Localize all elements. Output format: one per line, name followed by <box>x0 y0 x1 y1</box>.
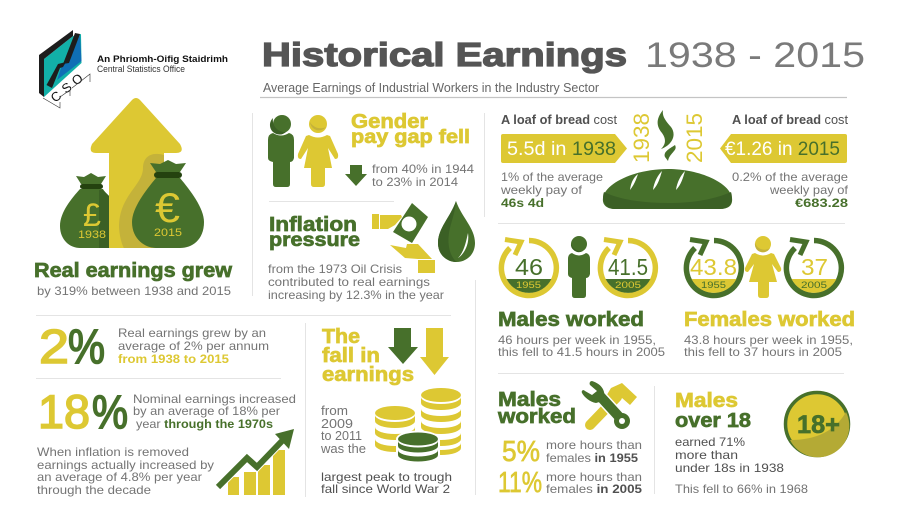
stat: 11 percent: more hours than <box>546 470 642 484</box>
text: from 1938 to 2015 <box>118 352 229 366</box>
icon: wrench and hammer <box>582 381 637 429</box>
panel: males worked hours <box>498 236 665 359</box>
icon: pound money bag 1938: £ <box>83 197 101 233</box>
icon: euro money bag 2015: 2015 <box>154 227 182 239</box>
chart: 2005 female hours ring: 37 <box>801 254 828 280</box>
text <box>675 435 808 496</box>
bread 2015 label: 0.2% of the average <box>732 170 848 184</box>
panel: 2 percent growth <box>39 321 269 374</box>
heading <box>351 111 470 148</box>
bread 2015 label: weekly pay of <box>769 183 849 197</box>
icon: pound money bag 1938: 1938 <box>78 229 106 241</box>
text: This fell to 66% in 1968 <box>675 482 808 496</box>
logo: Central Statistics Office: Central Statistics Office <box>97 64 185 75</box>
text <box>133 392 296 431</box>
text: 46 hours per week in 1955, <box>498 333 656 347</box>
icon: green down arrow <box>388 328 418 364</box>
text: average of 2% per annum <box>118 339 269 353</box>
heading: earnings <box>322 364 414 386</box>
text: inflation removed: through the decade <box>37 483 151 497</box>
text: increasing by 12.3% in the year <box>268 288 444 302</box>
heading <box>322 326 414 386</box>
heading: Gender <box>351 111 428 133</box>
icon: female figure <box>745 236 781 298</box>
chart: 1955 male hours ring <box>501 240 556 295</box>
text: largest peak: fall since World War 2 <box>321 482 450 496</box>
text: under 18s in 1938 <box>675 461 784 475</box>
panel: 18 percent growth <box>37 385 296 497</box>
bread 1938 label: weekly pay of <box>500 183 583 197</box>
chart: rising bars with arrow <box>218 429 294 495</box>
text: to 2011 <box>321 429 362 443</box>
text: contributed to real earnings <box>268 275 430 289</box>
bread 1938 label: 5.5d in 1938 <box>507 139 616 160</box>
heading: fall in <box>322 345 380 367</box>
icon: 18+ badge: 18+ <box>797 411 840 439</box>
text: by 319% between 1938 and 2015 <box>37 284 231 298</box>
logo: Central Statistics Office: O <box>69 70 86 88</box>
icon: pound money bag 1938 <box>60 173 109 248</box>
heading: Females worked <box>684 309 855 331</box>
text <box>268 262 444 302</box>
text: more than <box>675 448 738 462</box>
text: was the <box>320 442 366 456</box>
bread 2015 label: €683.28 <box>795 196 848 210</box>
text: 2009 <box>321 417 353 431</box>
heading: Males worked <box>498 309 644 331</box>
icon: euro money bag 2015: € <box>155 184 180 231</box>
panel: the fall in earnings <box>320 326 461 496</box>
logo: Central Statistics Office: C <box>48 88 64 105</box>
text <box>684 333 853 359</box>
panel: real earnings grew <box>34 98 232 298</box>
heading: Real earnings grew <box>34 260 232 282</box>
chart: 2005 male hours ring: 2005 <box>615 280 641 290</box>
heading: The <box>322 326 360 348</box>
icon: loaf of bread <box>603 169 732 209</box>
icon: male figure <box>568 236 590 298</box>
text: earned 71% <box>675 435 745 449</box>
text: largest peak <box>321 470 452 496</box>
text: inflation removed: earnings actually increased by <box>37 458 214 472</box>
icon: 18+ badge <box>786 392 849 457</box>
chart: 2005 female hours ring <box>786 240 841 295</box>
stat: 5 percent: more hours than <box>546 438 642 452</box>
chart: 2005 male hours ring: 41.5 <box>608 254 648 280</box>
big number: 2 <box>39 321 69 374</box>
big number: 18 <box>38 385 90 438</box>
text: 43.8 hours per week in 1955, <box>684 333 853 347</box>
bread 2015 label: €1.26 in 2015 <box>725 139 840 160</box>
icon: female figure <box>298 115 338 187</box>
text <box>320 404 366 456</box>
heading <box>675 390 751 432</box>
bread 1938 label: A loaf of bread cost <box>501 113 618 127</box>
icon: oil drop <box>438 201 475 262</box>
heading: pay gap fell <box>351 127 470 148</box>
title: Historical Earnings <box>262 36 627 73</box>
stat: 11 percent <box>498 467 642 499</box>
chart: 1955 male hours ring: 1955 <box>516 280 541 290</box>
heading: over 18 <box>675 410 751 432</box>
text: inflation removed <box>37 445 214 497</box>
big number: % <box>68 321 105 374</box>
icon: steam <box>658 110 676 161</box>
stat: 5 percent: females in 1955 <box>546 451 638 465</box>
panel: gender pay gap <box>268 111 474 189</box>
text <box>372 162 474 189</box>
text: year through the 1970s <box>136 417 273 431</box>
big number: % <box>92 385 128 438</box>
big number <box>39 321 105 374</box>
heading: worked <box>497 406 576 428</box>
bread 1938 label: 46s 4d <box>501 196 544 210</box>
heading <box>269 214 360 251</box>
stat: 5 percent: 5% <box>502 436 540 468</box>
big number <box>38 385 128 438</box>
heading <box>497 389 576 428</box>
panel: males worked more hours <box>497 381 642 499</box>
logo: Central Statistics Office: An Phriomh-Oifig Staidrimh <box>97 54 228 65</box>
icon: rising arrow <box>91 98 182 248</box>
text <box>498 333 665 359</box>
heading: Males <box>675 390 738 412</box>
panel: males over 18 <box>675 390 849 496</box>
heading: Males <box>498 389 561 411</box>
panel: inflation pressure <box>268 201 475 302</box>
icon: euro money bag 2015 <box>132 160 204 248</box>
bread 1938 label <box>500 113 627 210</box>
panel: females worked hours <box>684 236 855 359</box>
chart: 1955 female hours ring: 1955 <box>701 280 726 290</box>
text: inflation removed: an average of 4.8% per year <box>37 470 202 484</box>
rotated year 1938: 1938 <box>629 113 654 163</box>
text <box>118 326 269 366</box>
text: this fell to 41.5 hours in 2005 <box>498 345 665 359</box>
heading: pressure <box>269 230 360 251</box>
subtitle: Average Earnings of Industrial Workers in the Industry Sector <box>263 80 600 95</box>
title years: 1938 - 2015 <box>645 36 865 75</box>
stat: 5 percent <box>502 436 642 468</box>
text: from the 1973 Oil Crisis <box>268 262 402 276</box>
stat: 11 percent: females in 2005 <box>546 482 642 496</box>
text: this fell to 37 hours in 2005 <box>684 345 842 359</box>
chart: 1955 female hours ring: 43.8 <box>690 254 737 280</box>
text: inflation removed: When inflation is removed <box>37 445 189 459</box>
panel: loaf of bread <box>500 110 849 210</box>
text: from <box>321 404 348 418</box>
bread 1938 label: 1% of the average <box>501 170 603 184</box>
icon: coin stacks <box>375 388 461 464</box>
text: from 40% in 1944 <box>372 162 474 176</box>
text: by an average of 18% per <box>133 404 280 418</box>
rotated year 2015: 2015 <box>682 113 707 163</box>
heading: Inflation <box>269 214 357 236</box>
bread 2015 label: A loaf of bread cost <box>732 113 849 127</box>
chart: 2005 female hours ring: 2005 <box>801 280 827 290</box>
chart: 2005 male hours ring <box>600 240 655 295</box>
icon: down arrow <box>345 165 367 186</box>
chart: 1955 male hours ring: 46 <box>515 254 543 280</box>
chart: 1955 female hours ring <box>686 240 741 295</box>
icon: yellow down arrow <box>420 328 449 375</box>
logo: Central Statistics Office <box>39 30 228 108</box>
arrow shadow <box>119 154 164 248</box>
text: largest peak: largest peak to trough <box>321 470 452 484</box>
logo: Central Statistics Office: S <box>59 79 75 96</box>
icon: male figure <box>268 115 294 187</box>
text: to 23% in 2014 <box>372 175 458 189</box>
icon: money changing hands <box>372 203 435 273</box>
text: Nominal earnings increased <box>133 392 296 406</box>
bread 2015 label <box>720 113 849 210</box>
stat: 11 percent: 11% <box>498 467 542 499</box>
text: Real earnings grew by an <box>118 326 266 340</box>
